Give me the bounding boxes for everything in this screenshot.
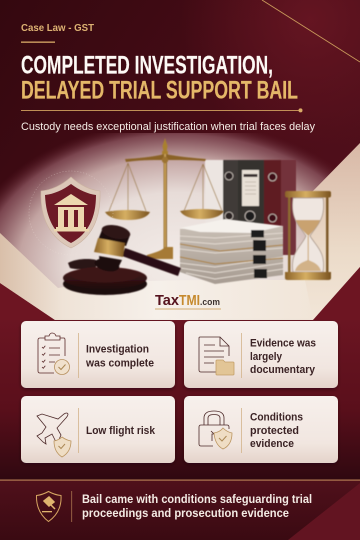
paper stack <box>180 219 283 284</box>
card: low flight risk <box>21 396 175 463</box>
logo: TaxTMI.com <box>155 293 221 310</box>
card: evidence documentary: Evidence was <box>250 338 316 350</box>
card: low flight risk: Low flight risk <box>86 425 156 437</box>
icon: gavel shield <box>36 492 61 522</box>
icon: padlock and shield <box>199 411 232 449</box>
title <box>21 52 298 104</box>
card: investigation complete: Investigation <box>86 344 149 356</box>
footer <box>0 480 360 540</box>
card: evidence documentary: largely <box>250 351 283 363</box>
eyebrow underline <box>21 42 55 43</box>
logo: TaxTMI.com: .com <box>200 297 220 308</box>
card: conditions protected evidence: protected <box>250 425 299 437</box>
card: evidence documentary <box>184 321 338 388</box>
footer: Bail came with conditions safeguarding trial <box>82 492 312 506</box>
hourglass <box>285 191 331 280</box>
title rule <box>21 108 302 112</box>
card: conditions protected evidence: Conditions <box>250 412 303 424</box>
card: conditions protected evidence <box>184 396 338 463</box>
icon: courthouse <box>54 194 89 232</box>
gavel <box>63 223 181 295</box>
icon: plane and shield <box>37 413 71 457</box>
icon: clipboard check <box>38 333 70 374</box>
logo: TaxTMI.com: TMI <box>179 293 200 309</box>
footer: proceedings and prosecution evidence <box>82 506 289 520</box>
logo: TaxTMI.com: Tax <box>155 293 179 309</box>
card: investigation complete <box>21 321 175 388</box>
binders <box>205 160 296 255</box>
subtitle: Custody needs exceptional justification when trial faces delay <box>21 121 315 133</box>
hero background <box>0 133 360 320</box>
card: evidence documentary: documentary <box>250 364 316 376</box>
card: conditions protected evidence: evidence <box>250 438 294 450</box>
icon: document and folder <box>199 337 234 375</box>
card: investigation complete: was complete <box>85 358 154 370</box>
shield emblem <box>29 171 113 255</box>
scale of justice <box>105 138 224 259</box>
eyebrow: case law: Case Law - GST <box>21 22 95 34</box>
